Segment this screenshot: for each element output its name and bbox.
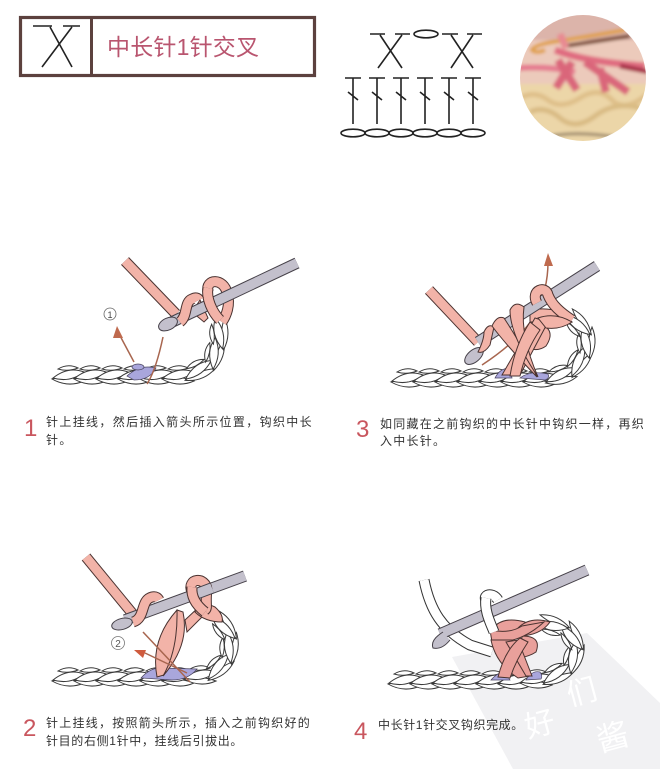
stitch chart — [341, 30, 485, 137]
step 4 diagram — [388, 570, 588, 689]
marker 1: 1 — [107, 310, 113, 320]
insertion point — [141, 668, 197, 680]
step 1 text: 1 — [24, 415, 37, 442]
title frame — [20, 17, 314, 76]
step 3 text — [356, 416, 645, 448]
arrow — [482, 253, 553, 365]
chain — [388, 612, 588, 689]
hook — [125, 576, 245, 620]
watermark band: 酱 — [592, 716, 633, 759]
step 2 diagram — [52, 557, 245, 686]
crossing strands — [492, 317, 537, 377]
step 1 diagram — [52, 261, 297, 385]
step 2 text: 针目的右侧1针中，挂线后引拔出。 — [46, 733, 243, 748]
arrows — [134, 632, 190, 682]
loop back — [208, 282, 228, 322]
step 3 text: 如同藏在之前钩织的中长针中钩织一样，再织 — [380, 416, 645, 431]
step 1 text — [24, 414, 313, 447]
marker 2: 2 — [115, 639, 121, 650]
step 3 text: 入中长针。 — [380, 433, 446, 448]
yarn — [429, 290, 478, 342]
watermark band: 好 — [521, 705, 559, 745]
white loop front — [486, 598, 494, 632]
step 4 text: 4 — [354, 718, 367, 745]
step 3 text: 3 — [356, 416, 369, 443]
marker 2 — [112, 636, 124, 650]
photo: crochet sample — [520, 15, 646, 141]
step 2 text — [23, 715, 311, 748]
hook — [440, 570, 587, 634]
step 4 text — [354, 717, 524, 745]
step 1 text: 针。 — [46, 432, 73, 447]
insertion points — [495, 368, 512, 378]
hook — [172, 263, 297, 322]
step 3 diagram — [391, 253, 597, 388]
step 4 text: 中长针1针交叉钩织完成。 — [378, 717, 524, 732]
marker 1 — [104, 308, 116, 320]
lobes — [195, 604, 222, 622]
chain — [52, 318, 229, 385]
yarn — [86, 557, 132, 613]
chain — [52, 610, 241, 686]
step 1 text: 针上挂线，然后插入箭头所示位置，钩织中长 — [46, 414, 313, 429]
hook — [478, 266, 597, 342]
watermark band: 们 — [563, 673, 601, 713]
step 2 text: 针上挂线，按照箭头所示，插入之前钩织好的 — [46, 715, 311, 730]
icon: crossed half double crochet symbol — [33, 26, 80, 67]
insertion point — [127, 367, 156, 380]
title: 中长针1针交叉 — [107, 34, 259, 60]
stitch cluster — [490, 620, 550, 678]
insertion point — [491, 672, 510, 680]
white yarn — [424, 580, 492, 652]
arrow — [113, 326, 163, 384]
chain — [391, 307, 595, 388]
white loop back — [485, 595, 498, 604]
strands — [156, 610, 179, 677]
back lobes — [530, 309, 572, 322]
wrap on hook — [133, 597, 159, 622]
step 2 text: 2 — [23, 715, 36, 742]
loops on hook — [535, 290, 572, 320]
watermark band — [452, 633, 660, 769]
yarn — [125, 261, 176, 314]
loop front — [208, 288, 220, 320]
